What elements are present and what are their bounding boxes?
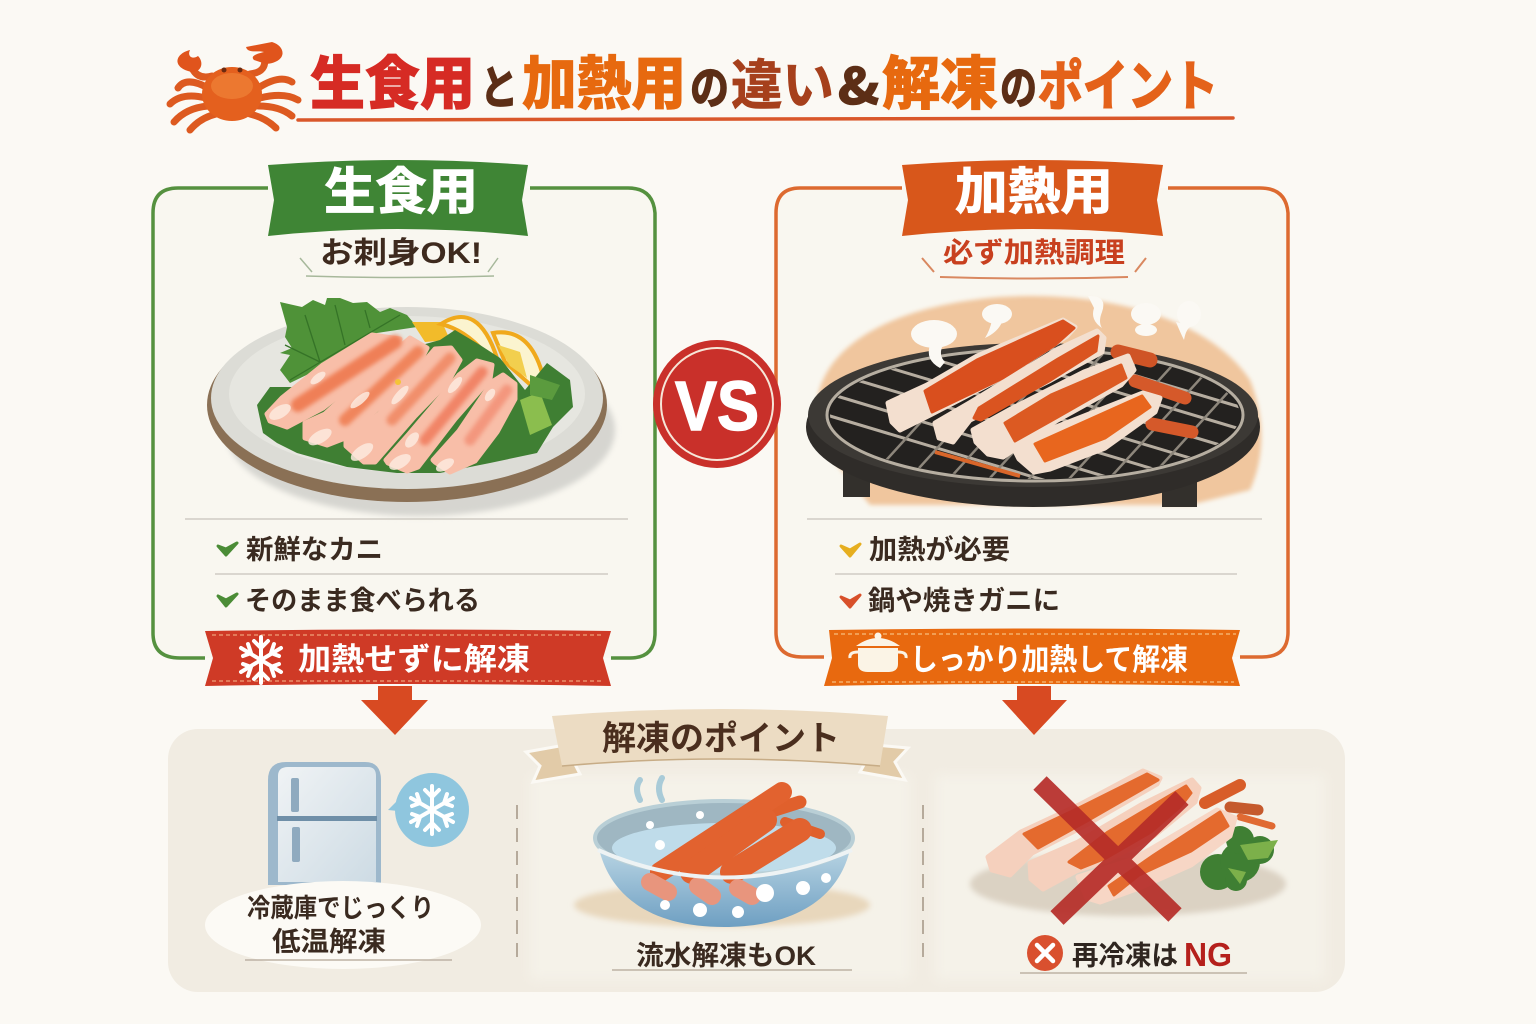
greens — [257, 330, 573, 473]
text bubble: 冷蔵庫でじっくり — [247, 893, 434, 923]
icon: pot — [850, 632, 906, 672]
illustration: grilled crab — [806, 294, 1264, 508]
check mark — [841, 595, 860, 607]
ribbon: thaw without heating — [205, 630, 611, 686]
title: & — [838, 47, 879, 119]
list: cooked features — [841, 534, 1060, 616]
heading ribbon: cooked: 加熱用 — [955, 152, 1113, 224]
heading ribbon: thawing points: 解凍のポイント — [602, 720, 840, 758]
text bubble — [205, 881, 481, 969]
grill legs — [843, 470, 1197, 507]
ribbon: thaw with thorough heating — [824, 628, 1240, 686]
title: 生食用 — [310, 37, 475, 121]
title: 違い — [731, 41, 834, 120]
ribbon: thaw with thorough heating: しっかり加熱して解凍 — [910, 644, 1188, 677]
grilled crab sticks — [888, 320, 1192, 472]
caption — [1020, 935, 1247, 973]
grill mesh — [830, 351, 1239, 479]
subheading: must cook: 必ず加熱調理 — [943, 237, 1125, 268]
heading ribbon: cooked — [902, 152, 1163, 236]
title: ポイント — [1038, 42, 1218, 121]
check mark — [218, 594, 237, 606]
list: cooked features: 加熱が必要 — [869, 534, 1010, 565]
title: の — [1000, 52, 1037, 118]
heading ribbon: raw: 生食用 — [324, 152, 478, 224]
refrigerator item — [205, 762, 481, 969]
title: 加熱用 — [522, 37, 686, 121]
title — [310, 37, 1218, 121]
text bubble: 低温解凍 — [272, 927, 386, 957]
subheading: must cook — [922, 237, 1146, 278]
subheading: sashimi OK — [300, 237, 498, 278]
steam — [911, 296, 1201, 368]
red cross mark — [1040, 783, 1182, 918]
icon: frozen bubble — [388, 773, 469, 847]
crab sticks — [267, 335, 515, 472]
VS badge: VS — [675, 367, 759, 445]
shiso leaf — [280, 298, 417, 383]
panel: cooked use — [776, 152, 1300, 657]
title: と — [480, 52, 518, 118]
caption: 流水解凍もOK — [636, 941, 817, 971]
list: raw features: そのまま食べられる — [245, 586, 480, 616]
check mark — [841, 544, 860, 556]
list: cooked features: 鍋や焼きガニに — [868, 586, 1060, 616]
lemons — [412, 317, 546, 390]
icon: snowflake — [241, 637, 281, 683]
list: raw features — [218, 535, 480, 616]
heading ribbon: raw — [268, 152, 528, 236]
no refreezing item — [970, 771, 1286, 973]
panel: thawing points — [168, 729, 1345, 992]
panel: raw use — [153, 152, 655, 658]
title underline — [298, 118, 1233, 120]
heading ribbon: thawing points — [526, 709, 908, 782]
VS badge — [653, 340, 781, 468]
subheading: sashimi OK: お刺身OK! — [320, 237, 482, 270]
divider — [807, 518, 1262, 520]
icon: refrigerator — [268, 762, 381, 885]
icon: crab — [170, 42, 298, 130]
list: raw features: 新鮮なカニ — [246, 535, 383, 565]
running water item — [574, 778, 870, 971]
dashed separator — [517, 805, 923, 960]
arrow: cooked to thawing — [1002, 686, 1067, 735]
illustration: water bowl with crab — [574, 778, 870, 927]
divider — [835, 573, 1237, 575]
illustration: crab sashimi plate — [207, 298, 615, 516]
arrow: raw to thawing — [361, 686, 428, 735]
title: の — [690, 52, 729, 118]
illustration: crossed crab — [970, 771, 1286, 916]
divider — [215, 573, 608, 575]
ribbon: thaw without heating: 加熱せずに解凍 — [298, 642, 530, 677]
caption: NG — [1184, 936, 1232, 973]
divider — [185, 518, 628, 520]
check mark — [218, 543, 237, 555]
title: 解凍 — [882, 37, 998, 121]
caption: 再冷凍は — [1072, 941, 1178, 971]
